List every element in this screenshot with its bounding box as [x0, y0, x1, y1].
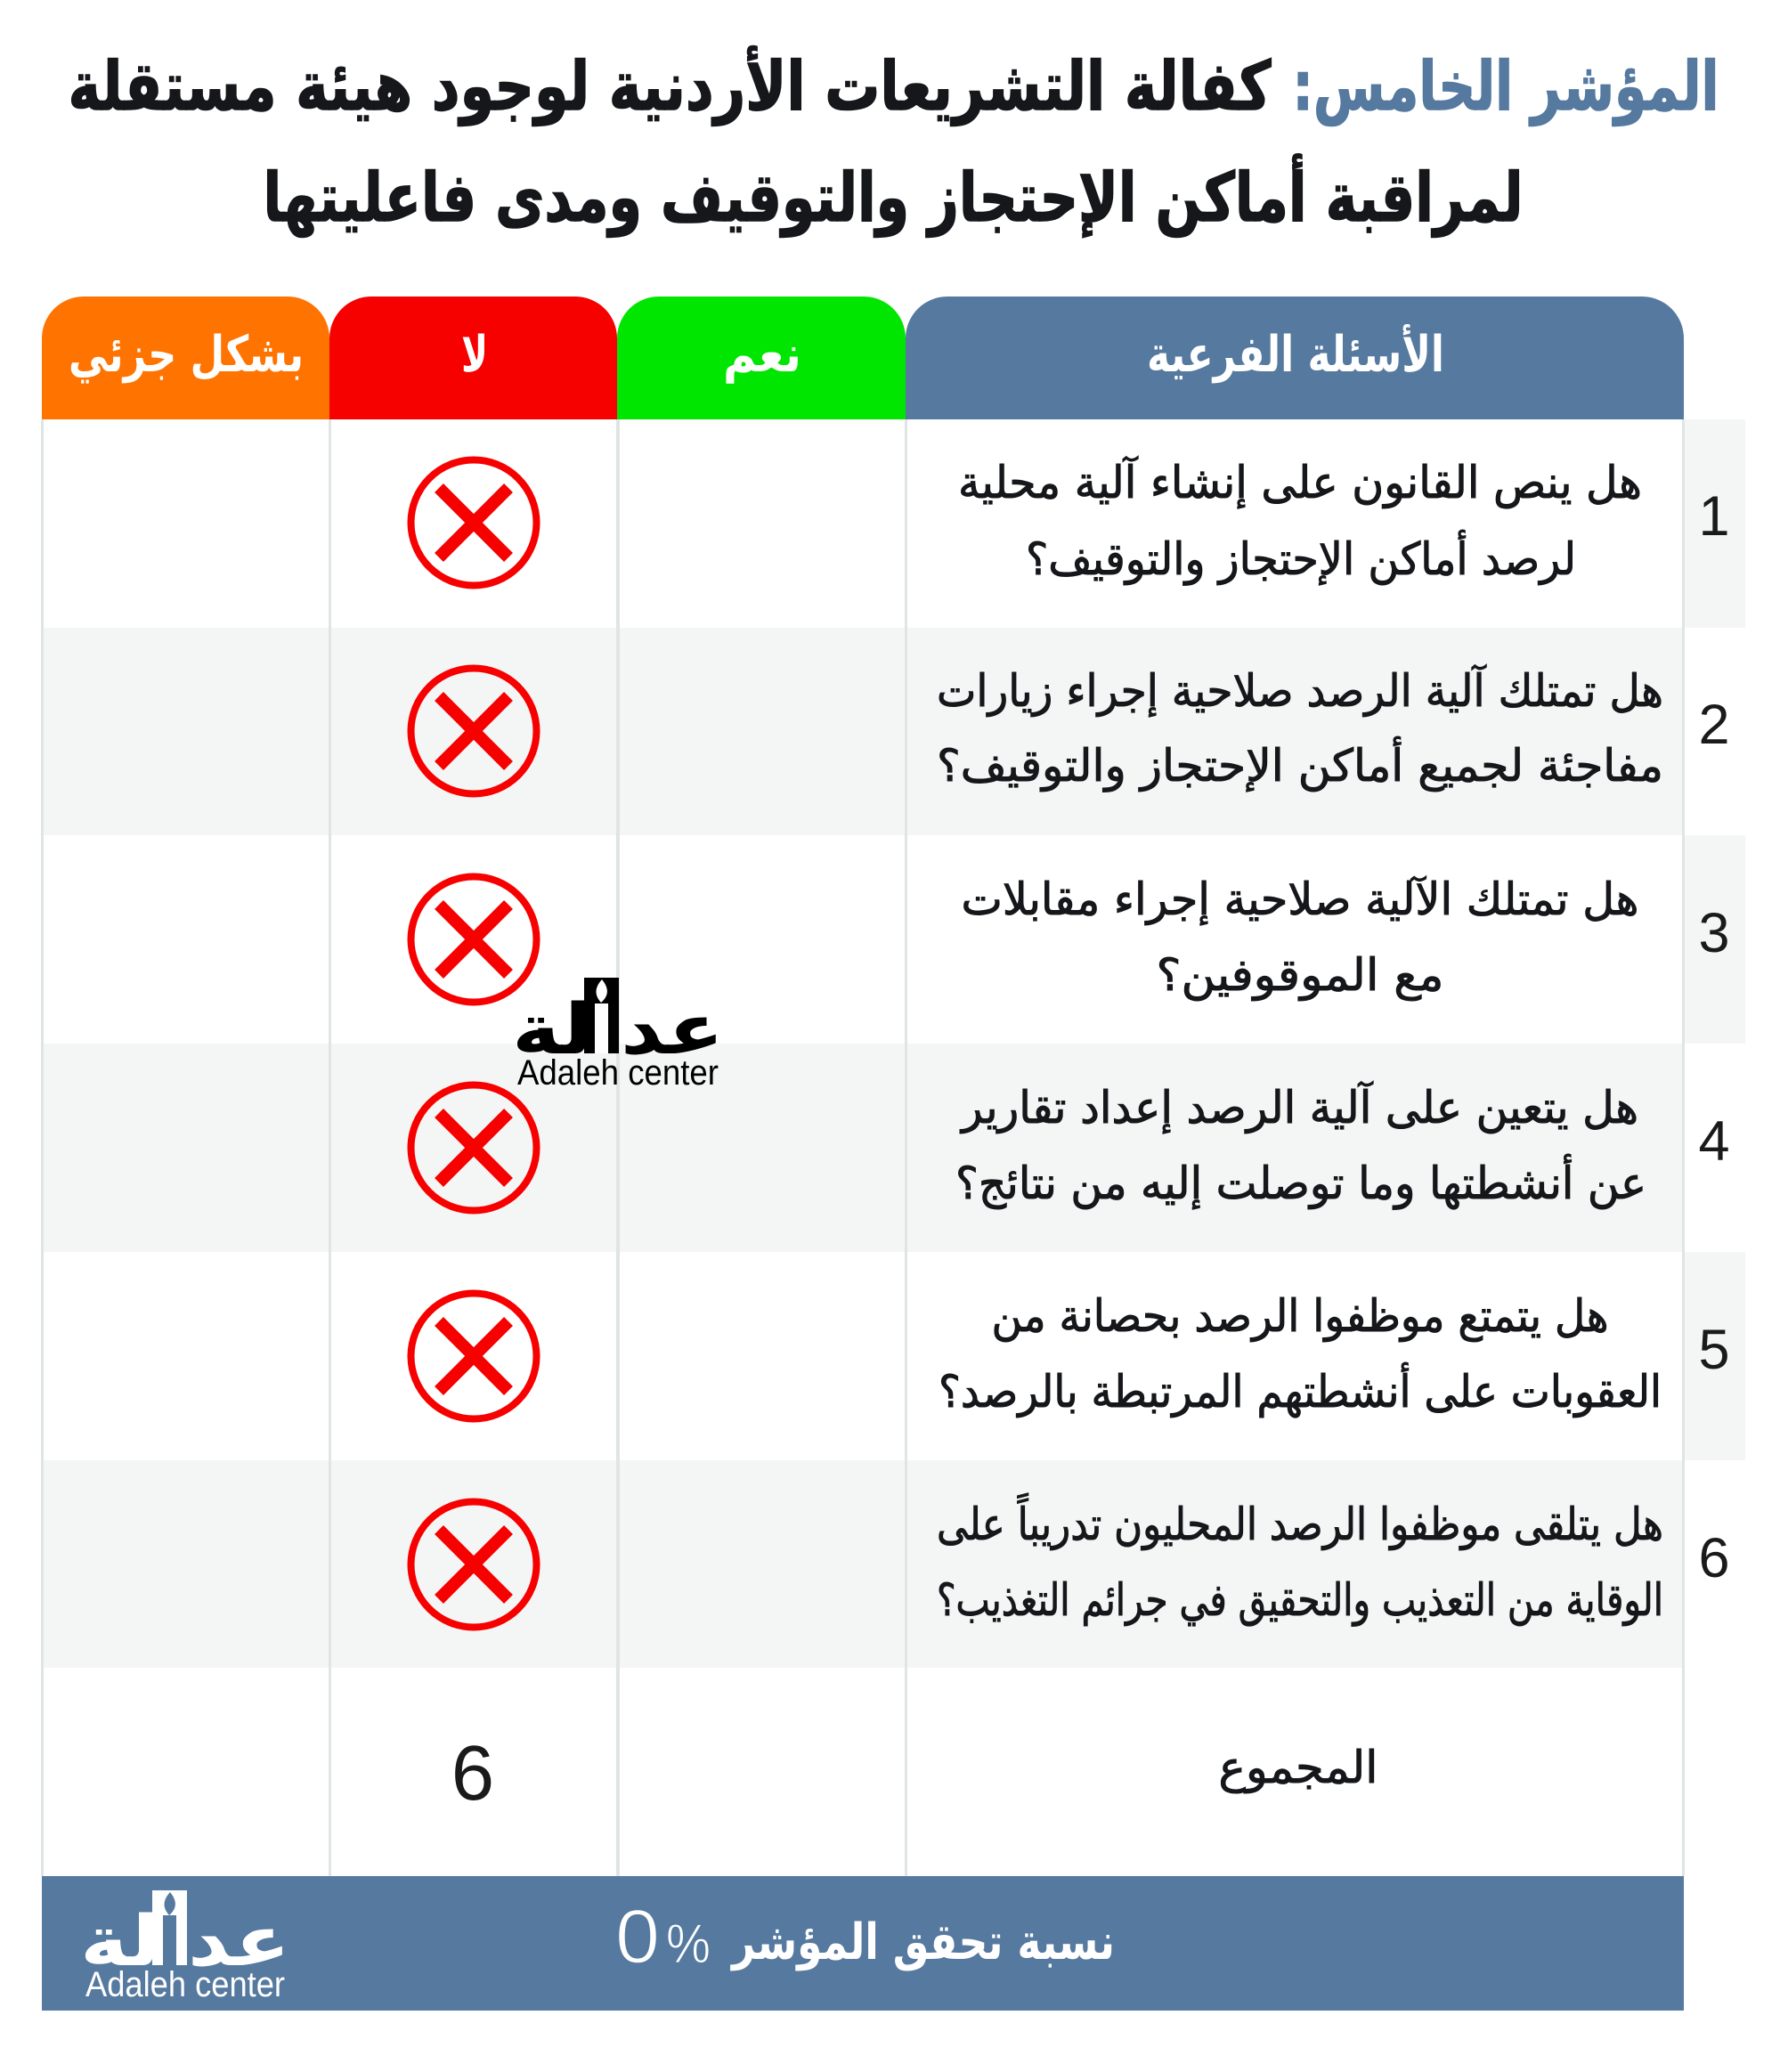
footer logo: عدالة [80, 1902, 290, 1982]
question 1: لرصد أماكن الإحتجاز والتوقيف؟ [1026, 530, 1576, 586]
question 5: العقوبات على أنشطتهم المرتبطة بالرصد؟ [939, 1362, 1662, 1418]
question 5 [939, 1290, 1662, 1418]
icon: red cross row 2 [411, 668, 536, 794]
footer bar [42, 1876, 1684, 2011]
row numbers [1698, 485, 1730, 1589]
column dividers [41, 419, 1685, 1876]
footer percentage [615, 1895, 711, 1979]
question 2: مفاجئة لجميع أماكن الإحتجاز والتوقيف؟ [937, 736, 1663, 792]
header: sub-questions: الأسئلة الفرعية [1147, 323, 1444, 384]
header: no: لا [461, 326, 488, 384]
row numbers: 3 [1698, 902, 1730, 964]
question 4: عن أنشطتها وما توصلت إليه من نتائج؟ [955, 1154, 1646, 1210]
icon: red cross row 3 [411, 876, 536, 1003]
question 2 [937, 664, 1663, 792]
title: كفالة التشريعات الأردنية لوجود هيئة مستقلة [68, 45, 1272, 126]
header: partial [42, 297, 329, 419]
icon: red cross row 4 [411, 1085, 536, 1211]
question 1: هل ينص القانون على إنشاء آلية محلية [958, 456, 1642, 509]
center logo: عدالة [512, 990, 724, 1070]
center logo [512, 978, 724, 1093]
icon: red cross row 5 [411, 1293, 536, 1419]
question 6: هل يتلقى موظفوا الرصد المحليون تدريباً على [937, 1492, 1663, 1550]
question 3: مع الموقوفين؟ [1156, 949, 1444, 1002]
header: sub-questions [906, 297, 1684, 419]
row stripes [42, 419, 1745, 1668]
question 3: هل تمتلك الآلية صلاحية إجراء مقابلات [962, 873, 1638, 926]
row numbers: 1 [1698, 485, 1730, 548]
question 1 [958, 456, 1642, 586]
question 5: هل يتمتع موظفوا الرصد بحصانة من [992, 1290, 1608, 1343]
question 2: هل تمتلك آلية الرصد صلاحية إجراء زيارات [937, 664, 1663, 718]
icon: red cross row 6 [411, 1501, 536, 1628]
footer percentage: % [666, 1914, 711, 1975]
title [68, 45, 1719, 238]
center logo: Adaleh center [517, 1053, 719, 1093]
header: no [329, 297, 617, 419]
row numbers: 2 [1698, 694, 1730, 756]
footer logo [80, 1890, 290, 2004]
header: yes [617, 297, 906, 419]
question 3 [962, 873, 1638, 1002]
icon: red cross row 1 [411, 459, 536, 586]
row numbers: 5 [1698, 1319, 1730, 1381]
question 4 [955, 1081, 1646, 1210]
footer percentage: 0 [615, 1895, 660, 1979]
footer label: نسبة تحقق المؤشر [730, 1914, 1115, 1971]
row numbers: 4 [1698, 1110, 1730, 1173]
header: partial: بشكل جزئي [69, 326, 304, 384]
question 4: هل يتعين على آلية الرصد إعداد تقارير [959, 1081, 1638, 1134]
row numbers: 6 [1698, 1527, 1730, 1589]
total label: المجموع [1218, 1742, 1378, 1793]
question 6 [937, 1492, 1663, 1627]
header: yes: نعم [723, 326, 801, 384]
footer logo: Adaleh center [85, 1965, 285, 2004]
total value: 6 [451, 1730, 494, 1816]
